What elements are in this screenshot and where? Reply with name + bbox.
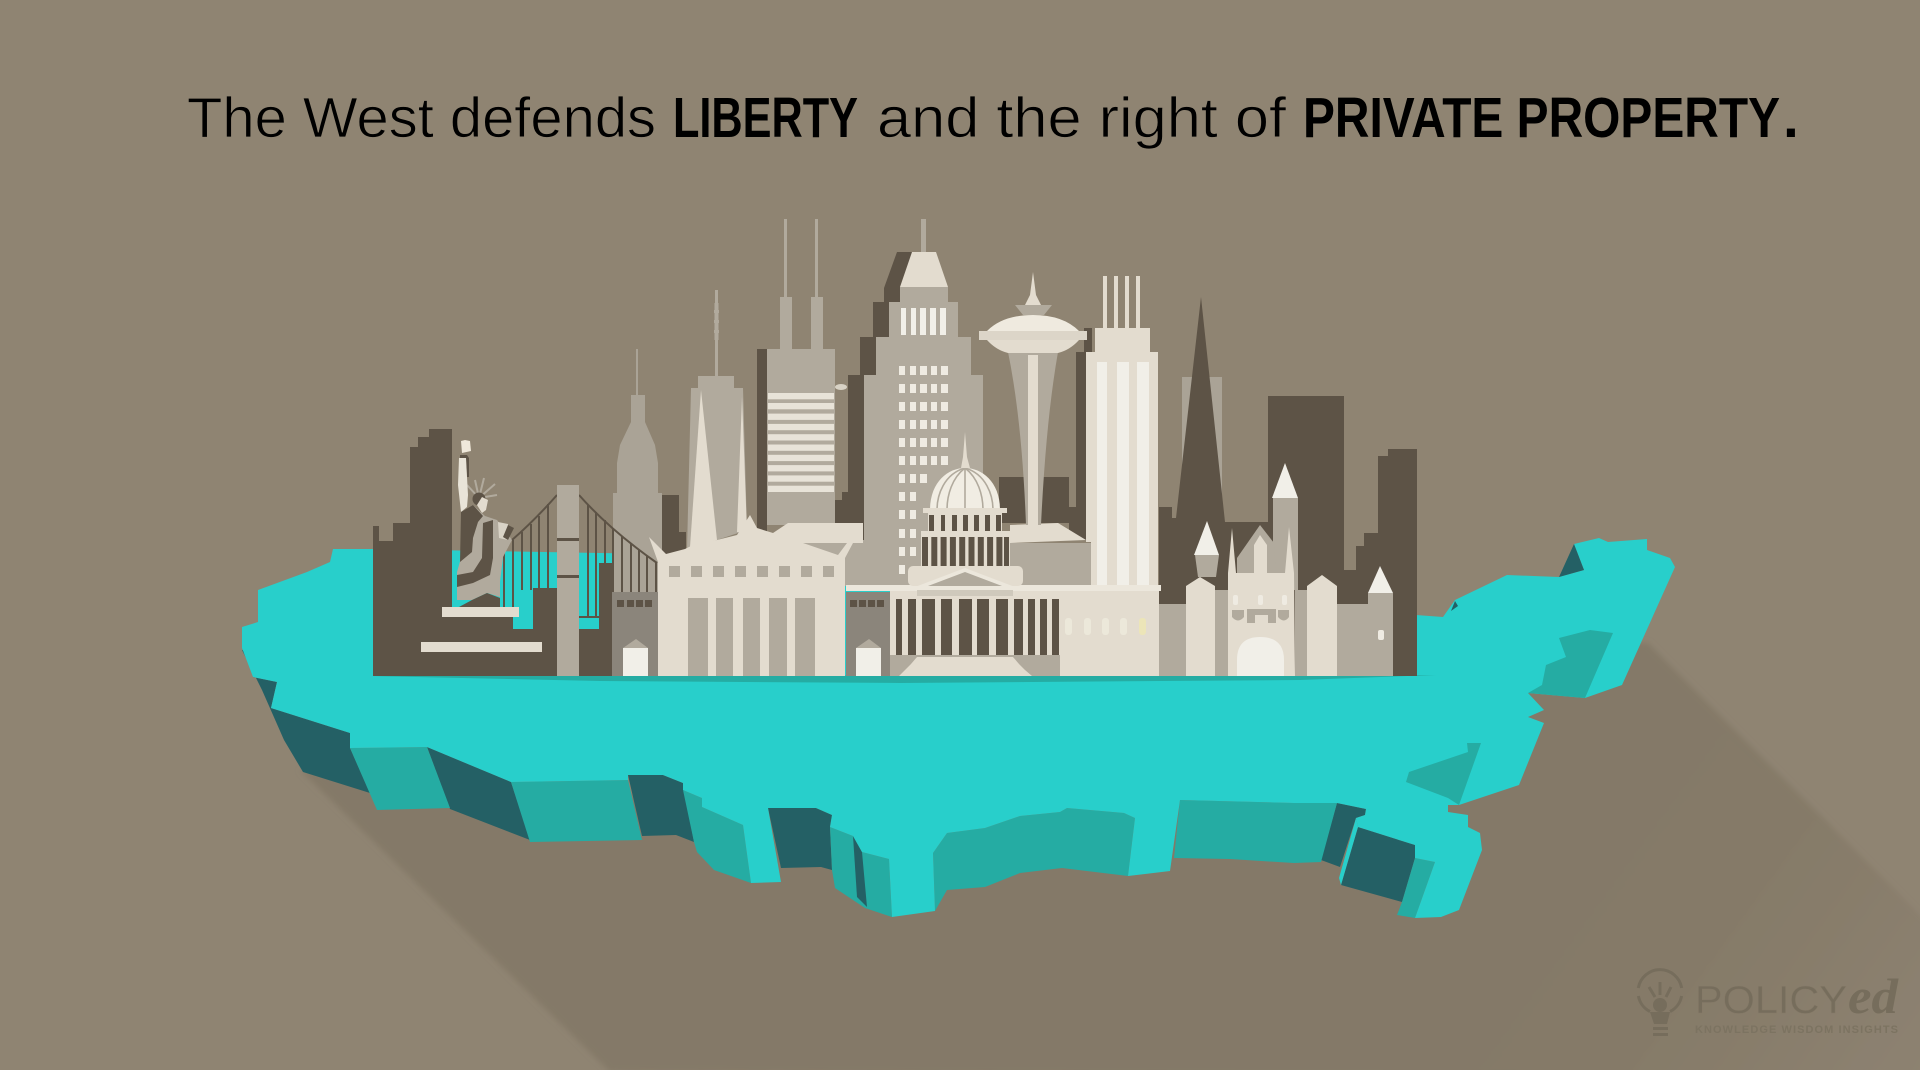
small grey building left <box>612 592 658 676</box>
grey block behind transamerica <box>1182 377 1222 537</box>
map of the United States <box>242 538 1675 918</box>
title <box>187 86 1799 150</box>
logo wordmark: POLICY <box>1695 979 1847 1022</box>
castle <box>1159 463 1393 676</box>
city hall tower <box>843 219 983 586</box>
icon: lightbulb <box>1638 970 1682 1036</box>
city skyline <box>373 219 1417 676</box>
map top surface <box>242 538 1675 918</box>
title: and the right of <box>877 86 1286 150</box>
one world trade center <box>687 290 747 550</box>
dark left block <box>373 429 452 676</box>
empire style tower <box>1086 276 1158 590</box>
title: PRIVATE PROPERTY <box>1303 86 1780 150</box>
empire state building <box>613 349 662 592</box>
title: The West defends <box>187 86 656 150</box>
title: LIBERTY <box>673 86 858 150</box>
logo tagline: KNOWLEDGE WISDOM INSIGHTS <box>1695 1024 1898 1036</box>
map inner bays and shading <box>372 544 1613 805</box>
map long shadow <box>300 640 1920 1070</box>
space needle <box>979 272 1091 585</box>
logo: POLICYed <box>1638 968 1899 1036</box>
statue of liberty <box>421 440 542 652</box>
dark right skyline and transamerica <box>1159 297 1417 676</box>
capitol building <box>846 432 1161 676</box>
willis tower <box>767 219 847 525</box>
map side faces <box>242 650 1435 918</box>
small grey building right <box>846 592 890 676</box>
logo suffix: ed <box>1848 968 1899 1024</box>
bank building <box>649 515 863 676</box>
dark background buildings <box>452 252 1092 676</box>
title: . <box>1783 86 1799 150</box>
golden gate bridge <box>504 485 657 676</box>
